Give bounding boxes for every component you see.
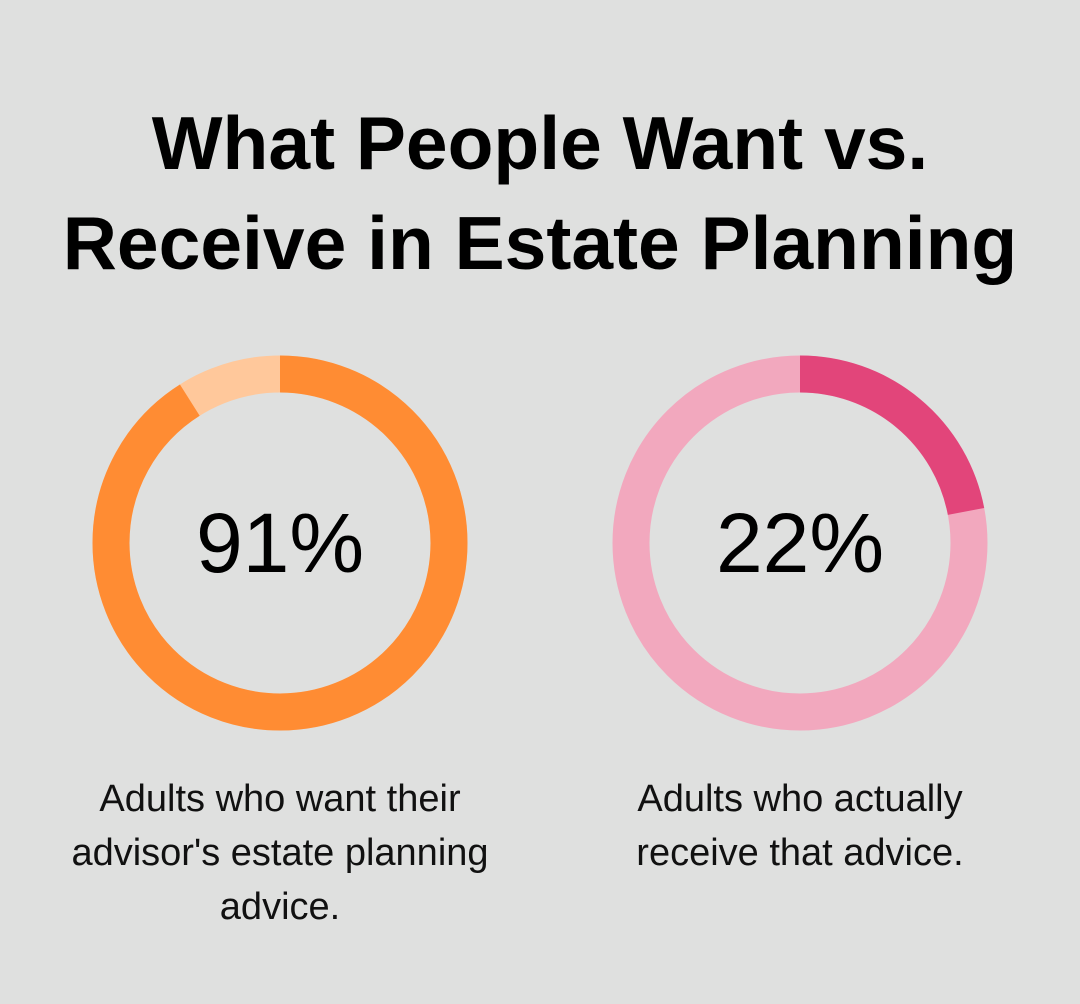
title: [63, 101, 1017, 285]
donut: 91%: [111, 374, 449, 712]
caption: left: advice.: [220, 886, 340, 928]
donut: 91%: 91%: [196, 496, 364, 590]
caption: left: [71, 778, 489, 928]
caption: left: advisor's estate planning: [71, 832, 489, 874]
caption: right: [636, 778, 964, 874]
caption: right: receive that advice.: [636, 832, 964, 874]
title: What People Want vs.: [152, 101, 928, 185]
donut: 22%: 22%: [716, 496, 884, 590]
title: Receive in Estate Planning: [63, 201, 1017, 285]
donut: 22%: [631, 374, 969, 712]
caption: right: Adults who actually: [637, 778, 963, 820]
caption: left: Adults who want their: [99, 778, 461, 820]
